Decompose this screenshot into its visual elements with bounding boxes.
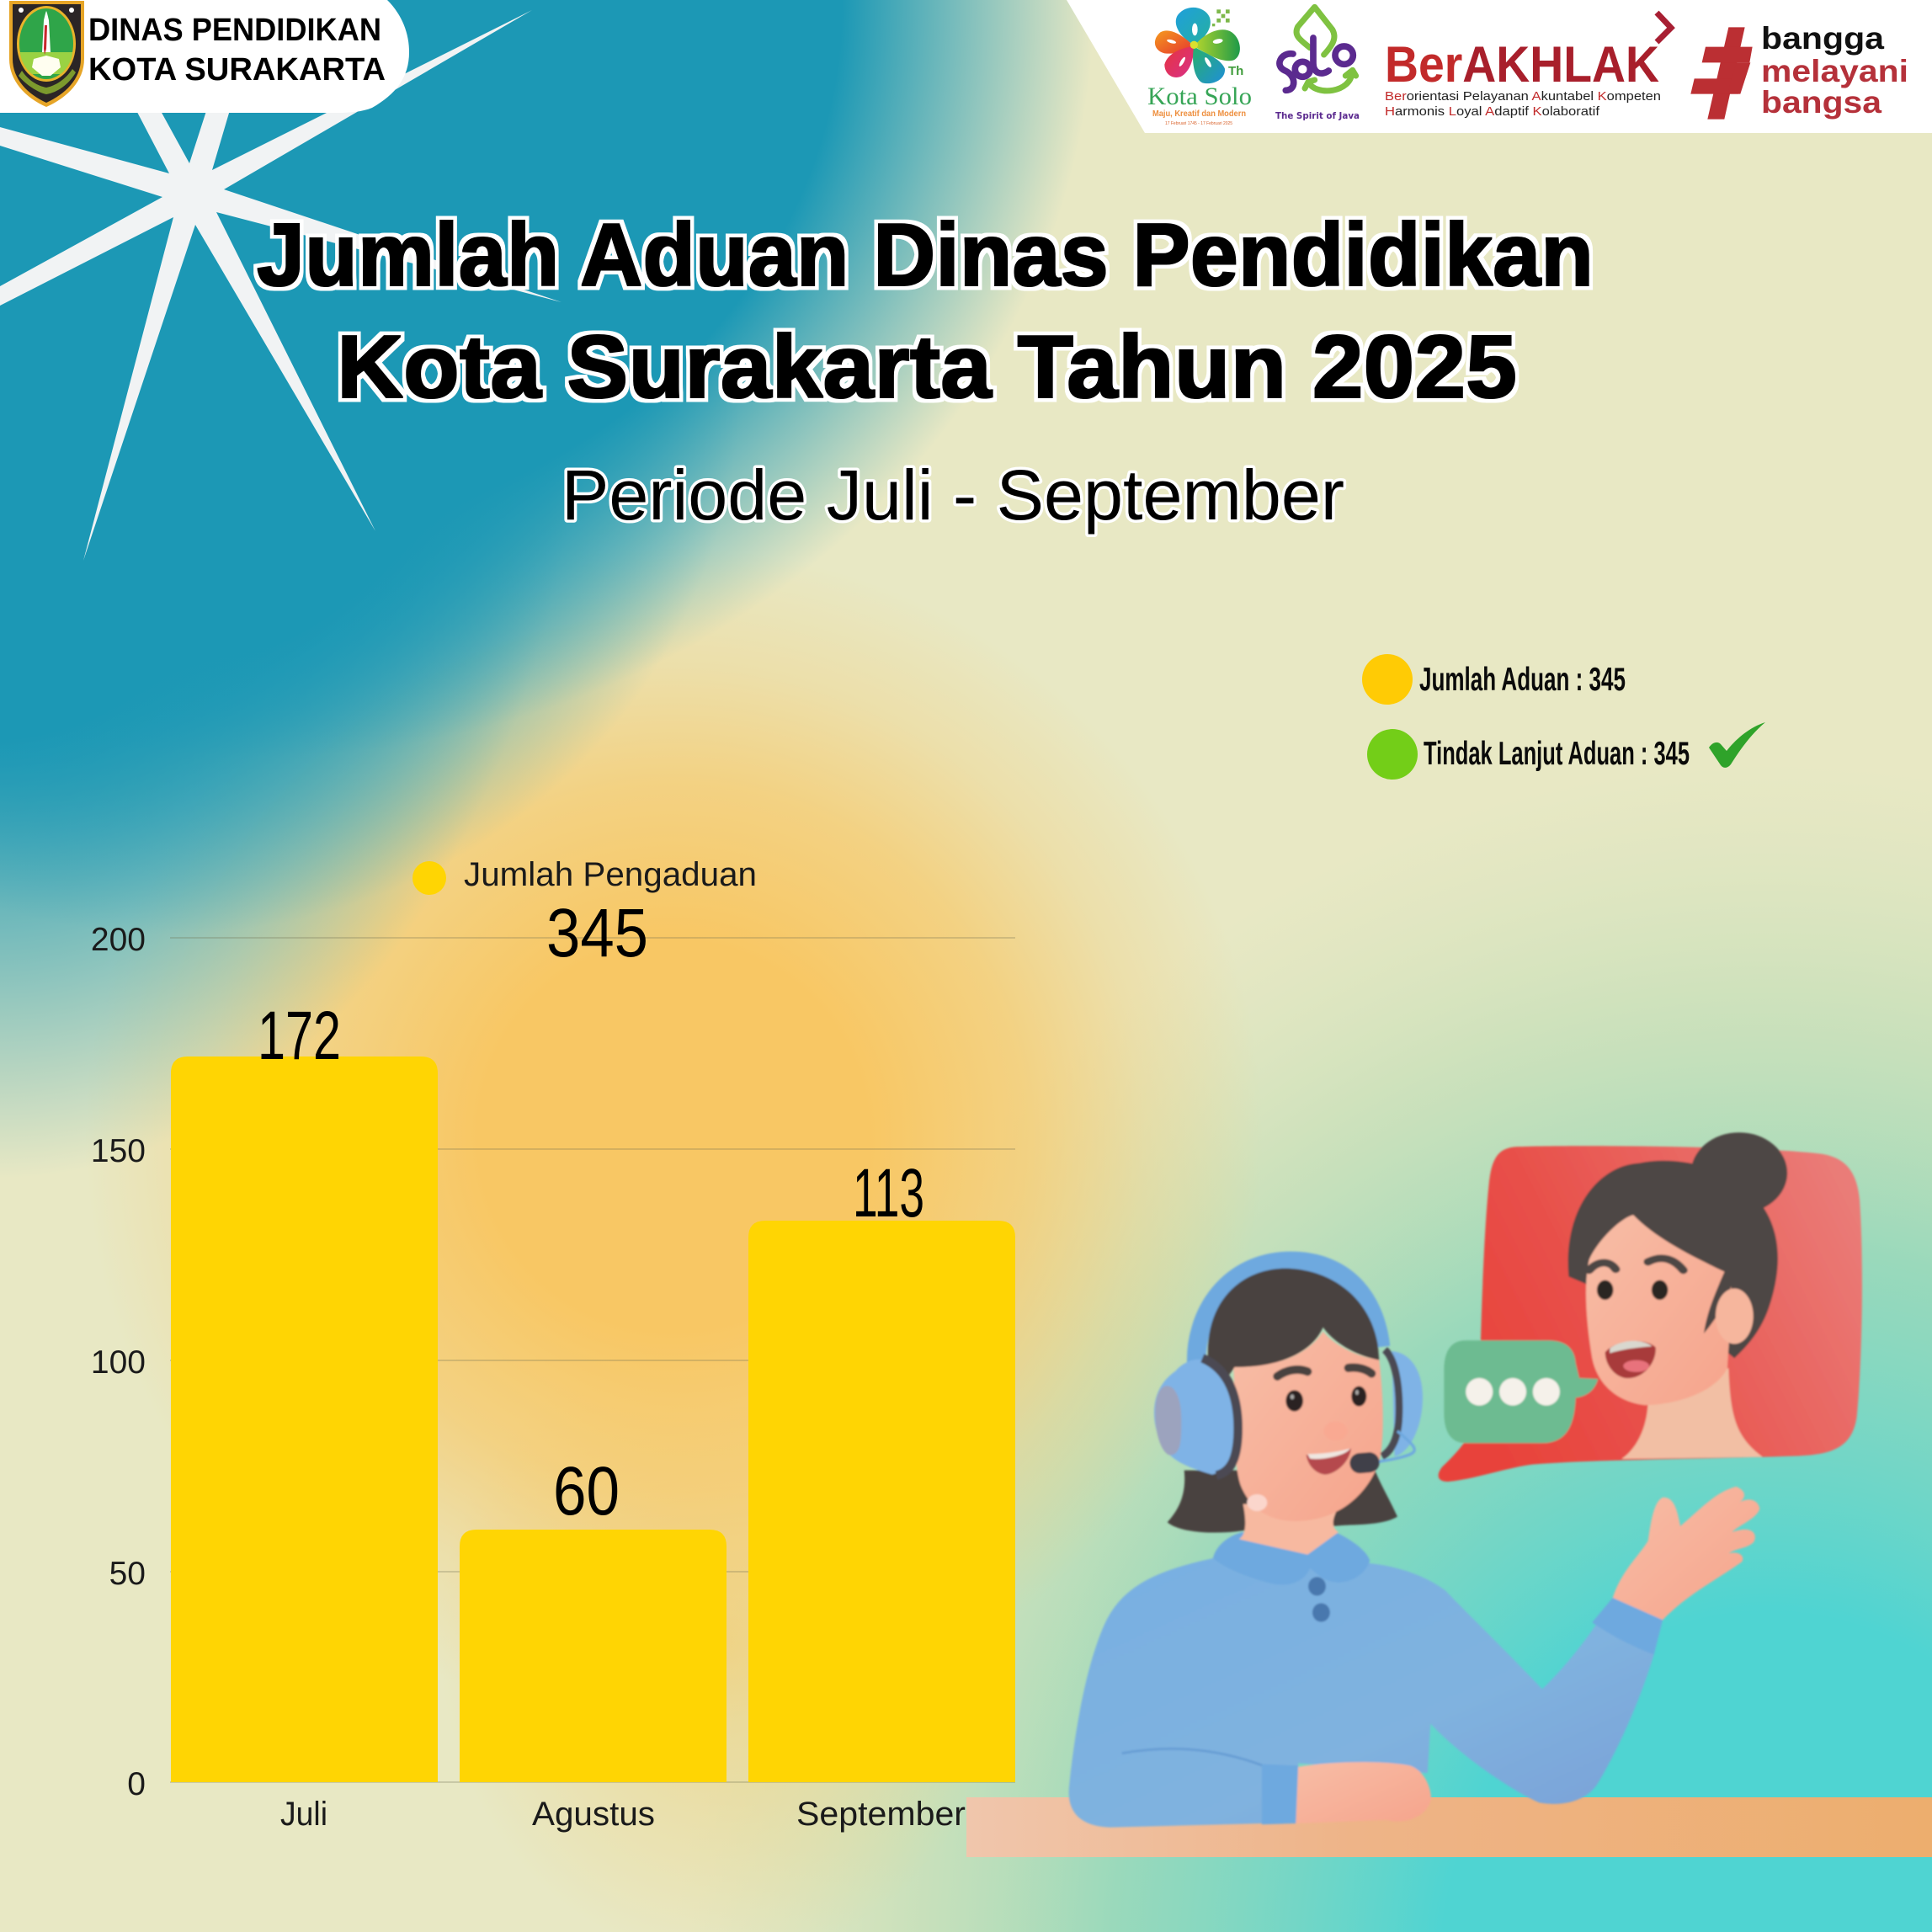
y axis labels	[91, 922, 146, 1802]
logo: Kota Solo	[1147, 8, 1252, 126]
legend item: Tindak Lanjut Aduan: Tindak Lanjut Aduan : 345	[1424, 736, 1690, 772]
logo: BerAKHLAK: Berorientasi Pelayanan Akuntabel Kompeten	[1385, 89, 1661, 104]
starburst decoration	[0, 10, 562, 561]
y axis labels: 150	[91, 1133, 146, 1169]
logo: BerAKHLAK: BerAKHLAK	[1385, 36, 1659, 93]
icon: Surakarta coat of arms	[9, 1, 84, 107]
legend item: Tindak Lanjut Aduan	[1367, 722, 1765, 780]
resting hand	[1296, 1762, 1431, 1823]
bar chart: Jumlah Pengaduan	[91, 856, 1015, 1833]
title: Jumlah Aduan Dinas Pendidikan	[257, 205, 1594, 305]
shirt button	[1308, 1577, 1326, 1596]
logo: Solo The Spirit of Java	[1275, 7, 1360, 121]
speech bubble: typing dots	[1444, 1340, 1598, 1443]
logo: bangga melayani bangsa: bangga	[1761, 21, 1884, 56]
bar: Juli	[171, 1056, 438, 1782]
title: Kota Surakarta Tahun 2025	[337, 317, 1517, 417]
x axis labels	[280, 1796, 966, 1833]
logo: BerAKHLAK	[1385, 13, 1671, 119]
raised sleeve cuff	[1592, 1598, 1663, 1654]
logo: Kota Solo: Kota Solo	[1147, 82, 1252, 110]
x axis labels: Juli	[280, 1796, 327, 1833]
bar values: 113	[853, 1155, 924, 1232]
desk	[966, 1797, 1932, 1857]
logo: Kota Solo: 17 Februari 1745 - 17 Februari 2025	[1165, 121, 1232, 126]
bar: September	[748, 1221, 1015, 1782]
icon: check mark	[1709, 722, 1765, 768]
legend item: Jumlah Aduan	[1362, 654, 1626, 705]
chart legend: Jumlah Pengaduan	[464, 856, 757, 893]
agency name: DINAS PENDIDIKAN	[88, 13, 381, 48]
bar values	[258, 895, 924, 1530]
cuff	[1262, 1764, 1298, 1824]
y axis labels: 0	[127, 1766, 146, 1802]
summary legend	[1362, 654, 1765, 780]
raised hand	[1613, 1487, 1759, 1620]
logo: Kota Solo: Maju, Kreatif dan Modern	[1152, 109, 1246, 119]
x axis labels: September	[796, 1796, 966, 1833]
x axis labels: Agustus	[532, 1796, 655, 1833]
header badge: Dinas Pendidikan	[0, 0, 409, 113]
bar values: 172	[258, 998, 341, 1074]
legend item: Jumlah Aduan: Jumlah Aduan : 345	[1419, 662, 1626, 698]
logo: bangga melayani bangsa	[1690, 21, 1908, 120]
agency name: KOTA SURAKARTA	[88, 52, 386, 88]
logo: BerAKHLAK: Harmonis Loyal Adaptif Kolaboratif	[1385, 104, 1600, 119]
shirt button	[1312, 1603, 1330, 1622]
bar: Agustus	[460, 1530, 726, 1782]
illustration: call centre agent and customer	[1069, 1132, 1862, 1828]
sleeve fold	[1122, 1748, 1263, 1765]
agent body	[1069, 1558, 1663, 1828]
logo: Solo The Spirit of Java: The Spirit of Java	[1275, 110, 1360, 121]
y axis labels: 100	[91, 1344, 146, 1381]
bar values: 345	[546, 895, 648, 971]
bar values: 60	[553, 1453, 620, 1530]
speech bubble with customer	[1439, 1132, 1862, 1482]
logo: bangga melayani bangsa: melayani	[1761, 54, 1908, 88]
header logos strip	[1067, 0, 1932, 133]
collar	[1213, 1530, 1370, 1584]
agent head with headset	[1154, 1261, 1423, 1555]
y axis labels: 200	[91, 922, 146, 958]
agency name	[88, 13, 386, 88]
y axis labels: 50	[109, 1556, 146, 1592]
subtitle: Periode Juli - September	[562, 455, 1344, 535]
logo: bangga melayani bangsa: bangsa	[1761, 85, 1881, 120]
title	[257, 205, 1594, 417]
logo: Kota Solo: Th	[1228, 64, 1243, 78]
